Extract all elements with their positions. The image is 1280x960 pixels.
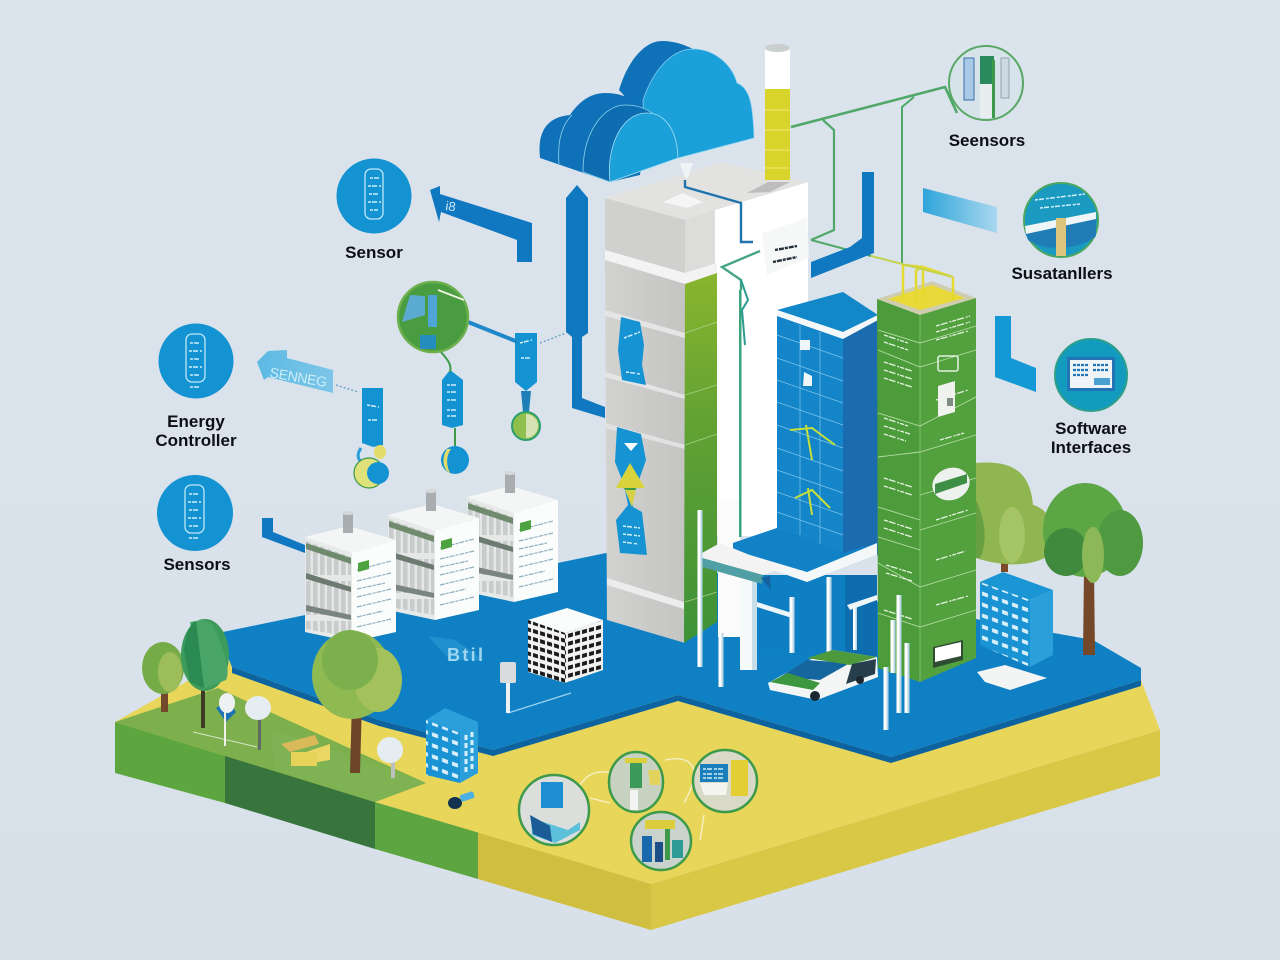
roof wire (685, 180, 753, 242)
floor slab (733, 528, 877, 582)
blue tower block (733, 292, 878, 665)
green side panel (684, 273, 717, 643)
building dark side (843, 320, 878, 558)
white column under building (740, 575, 757, 670)
small white units (305, 471, 558, 642)
pillar circle (609, 752, 663, 812)
right trees (976, 462, 1143, 655)
panel unit (938, 381, 955, 417)
tower bands (878, 326, 976, 627)
yellow top surface (115, 660, 1160, 884)
small blue building right (980, 572, 1053, 667)
small cloud middle (583, 105, 658, 182)
blue arrow: sensor: i8 (445, 198, 457, 214)
blue arrow: fading bar (923, 188, 997, 233)
controller wire (722, 251, 760, 290)
main cooling tower (605, 162, 808, 643)
blue arrow: roof right (811, 172, 874, 278)
icon: sensors (157, 475, 233, 551)
green stripe (739, 290, 742, 537)
device bubble (928, 462, 974, 506)
label: software interfaces: Software (1055, 419, 1127, 438)
green data tower (877, 265, 976, 682)
platform base (115, 553, 1160, 930)
yellow roof rails (903, 265, 953, 303)
wiring (685, 87, 957, 345)
controller box (762, 218, 809, 275)
white core and roof (605, 162, 808, 637)
small post sensor (500, 662, 571, 713)
label: seensors: Seensors (949, 131, 1025, 150)
small scanner (448, 791, 475, 809)
chimney (747, 44, 790, 193)
label: sensors: Sensors (163, 555, 231, 574)
tower labels right (936, 316, 970, 605)
small tree (142, 642, 184, 712)
cabinet circle (631, 812, 691, 870)
blue arrow: lower left (262, 518, 305, 553)
grey tower faces (605, 198, 717, 643)
unit middle (388, 489, 479, 620)
yellow side faces (478, 730, 1160, 930)
blue arrow: sensor (430, 186, 532, 262)
label: susatanllers: Susatanllers (1011, 264, 1113, 283)
tower roof (877, 281, 976, 315)
connector arrows (580, 759, 704, 840)
left trees (142, 619, 402, 773)
pale arrow with text: SENNEG (268, 364, 328, 390)
tower labels left (884, 335, 912, 619)
label: energy controller: Energy (167, 412, 225, 431)
label: sensor: Sensor (345, 243, 403, 262)
icon: sustainability circle (1024, 183, 1098, 257)
blue floor label (428, 636, 484, 665)
support frames (757, 577, 877, 653)
center tree (312, 630, 402, 773)
green lawn surface (115, 688, 426, 802)
cloud (540, 41, 754, 182)
tower decals (615, 317, 647, 555)
roof beacon (680, 163, 693, 178)
hanging tag 2 (441, 370, 469, 474)
lower circles group (519, 750, 757, 870)
front poles (698, 510, 910, 730)
lawn lamp sensors (193, 693, 403, 778)
large cloud front (643, 49, 754, 165)
dotted link (336, 333, 566, 392)
tall tree (181, 619, 229, 728)
label: software interfaces: Interfaces (1051, 438, 1131, 457)
hanging tag 1 (354, 388, 389, 488)
display circle (693, 750, 757, 812)
tablet screen (933, 640, 963, 668)
blue arrow: tall up (566, 185, 605, 418)
under slab space (757, 575, 877, 665)
hanging tag 3 (512, 333, 540, 440)
label: energy controller: Controller (155, 431, 237, 450)
large cloud back (619, 41, 700, 135)
yellow box (281, 735, 330, 766)
blue platform (218, 553, 1141, 763)
unit front (305, 511, 396, 642)
kiosk circle (519, 775, 589, 845)
grated cooling unit (528, 608, 603, 683)
icon: seensors circle (949, 46, 1023, 120)
icon: software circle (1055, 339, 1127, 411)
building circuit face (777, 316, 843, 555)
cloud fold lines (559, 115, 572, 164)
device badge (938, 356, 958, 371)
left face (877, 299, 920, 682)
light tree (976, 462, 1054, 572)
green side faces (115, 722, 478, 879)
icon: energy controller (158, 324, 234, 398)
right face (920, 298, 976, 682)
blue arrow: lower right (995, 316, 1036, 392)
electric car (768, 650, 878, 701)
dark tree (1043, 483, 1143, 655)
small blue building front (426, 708, 478, 783)
unit back (467, 471, 558, 602)
small cloud back (540, 93, 648, 182)
building rim (777, 310, 878, 339)
pale arrow with text (257, 350, 333, 393)
sensor wires (791, 87, 957, 127)
icon: sensor (336, 158, 412, 234)
blue floor label: Btil (447, 645, 483, 665)
white cushion (977, 665, 1047, 690)
icon: green scene circle (398, 282, 518, 372)
small cloud front (609, 113, 678, 182)
canopy (702, 543, 782, 590)
building top (777, 292, 878, 332)
